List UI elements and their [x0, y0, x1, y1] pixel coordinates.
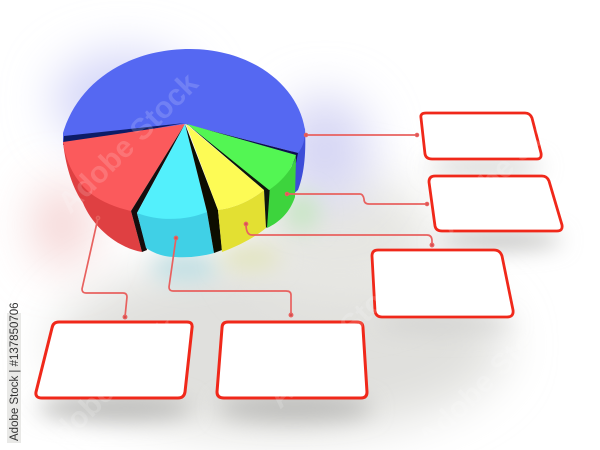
slice: red — [63, 124, 185, 252]
box 1 — [421, 113, 541, 159]
stock id caption: Adobe Stock | #137850706 — [9, 302, 21, 441]
box 3 — [372, 250, 513, 317]
connector: blue slice to box 1 — [305, 134, 418, 136]
connector: red slice to box 4 — [82, 216, 127, 319]
connector: cyan slice to box 5 — [169, 236, 293, 317]
slice: green — [187, 124, 296, 228]
watermarks: Adobe Stock — [432, 87, 585, 240]
gap shadow: red to cyan — [131, 124, 185, 252]
connector: green slice to box 2 — [286, 193, 428, 205]
box 4 — [36, 322, 192, 398]
gap shadow: cyan to yellow — [185, 124, 222, 253]
slice: cyan — [137, 124, 214, 257]
slice: yellow — [186, 124, 266, 252]
gap shadow: yellow to green — [187, 124, 270, 228]
watermarks: Adobe Stock — [52, 67, 205, 220]
watermarks: Adobe Stock — [262, 262, 415, 415]
box 5 — [217, 322, 367, 398]
slice: blue — [63, 49, 305, 195]
box 2 — [429, 176, 562, 231]
pie chart — [63, 49, 305, 257]
connector: yellow slice to box 3 — [244, 222, 434, 247]
background shadows and colour glows — [34, 52, 562, 435]
watermarks — [32, 67, 585, 450]
